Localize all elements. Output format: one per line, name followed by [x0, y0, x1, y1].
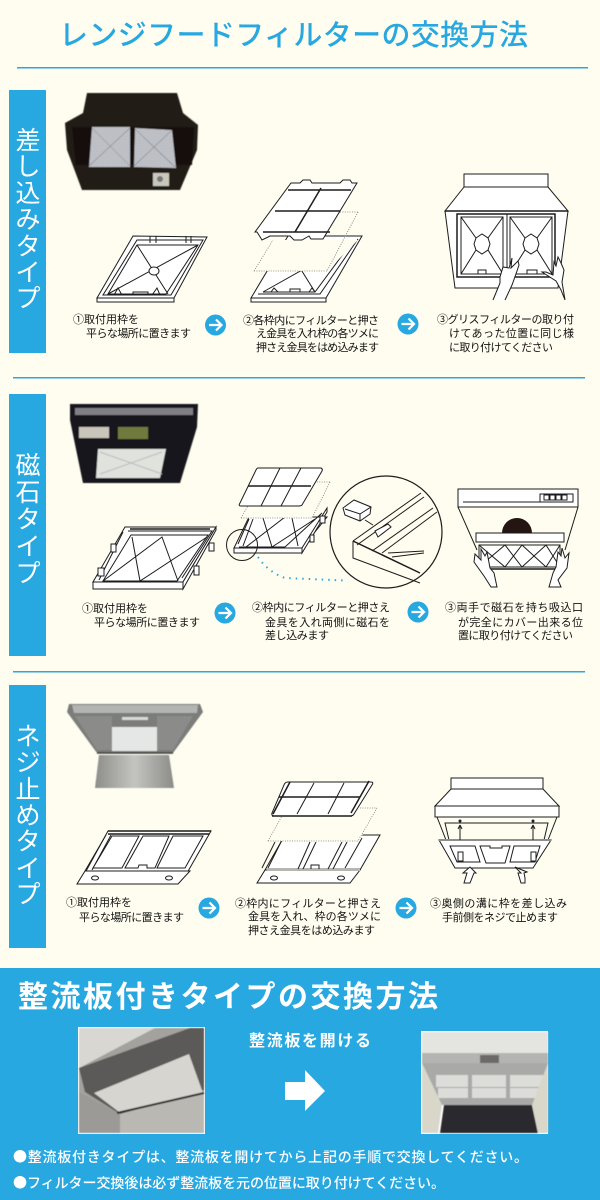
text: step 3: が完全にカバー出来る位 [458, 615, 583, 629]
text: step 2 [252, 600, 390, 642]
diagram: hood with hands step 3 [445, 174, 568, 300]
text: step 3: ③奥側の溝に枠を差し込み [430, 896, 567, 910]
caption: open the plate: 整流板を開ける [249, 1032, 371, 1050]
diagram: magnet frame step 1 [93, 527, 216, 589]
section label: magnet: 磁石タイプ [15, 452, 41, 588]
heading: 整流板付きタイプの交換方法 [18, 981, 438, 1014]
photo: closed baffle plate [78, 1027, 205, 1134]
notes: ●フィルター交換後は必ず整流板を元の位置に取り付けてください。 [13, 1173, 445, 1193]
text: step 2: ②各枠内にフィルターと押さ [243, 313, 379, 327]
text: step 1 [66, 895, 184, 924]
text: step 2: 金具を入れ、枠の各ツメに [248, 909, 381, 923]
arrow icon [205, 314, 226, 336]
text: step 2 [235, 896, 381, 937]
diagram: screw filter assembly step 2 [257, 781, 380, 883]
magnet block [343, 500, 371, 521]
diagram: hood with hands magnet step 3 [458, 489, 578, 587]
section label: screw [9, 685, 46, 948]
arrow icon [398, 314, 418, 334]
text: step 2: 押さえ金具をはめ込みます [248, 923, 375, 937]
diagram: hood with screws step 3 [435, 778, 559, 883]
arrow icon [198, 898, 220, 918]
section label: screw: ネジ止めタイプ [15, 723, 41, 909]
photo: black hood underside [70, 404, 198, 483]
text: step 2: ②枠内にフィルターと押さえ [235, 896, 381, 910]
arrow: white right [285, 1070, 325, 1111]
hand left [493, 258, 519, 300]
dotted leader [258, 557, 345, 580]
text: step 2: 差し込みます [265, 629, 329, 642]
text: step 1: ①取付用枠を [66, 895, 132, 909]
text: step 2: 押さえ金具をはめ込みます [256, 340, 379, 354]
title: レンジフードフィルターの交換方法 [59, 19, 528, 52]
arrow icon [214, 602, 236, 624]
text: step 1: 平らな場所に置きます [94, 615, 200, 629]
text: step 3 [445, 600, 583, 642]
text: step 2: え金具を入れ枠の各ツメに [256, 326, 379, 340]
text: step 3: 置に取り付けてください [458, 629, 573, 642]
text: step 1 [82, 601, 200, 629]
photo: black range hood [65, 93, 198, 190]
text: step 1: 平らな場所に置きます [86, 326, 191, 340]
text: step 1: ①取付用枠を [82, 601, 148, 615]
section label: sashikomi: 差し込みタイプ [15, 127, 41, 313]
arrow icon [408, 602, 428, 622]
text: step 3: ③グリスフィルターの取り付 [437, 312, 574, 326]
hand right [542, 257, 565, 300]
text: step 2: ②枠内にフィルターと押さえ [252, 600, 390, 614]
text: step 3 [430, 896, 567, 924]
notes [13, 1147, 528, 1193]
text: step 3 [437, 312, 574, 354]
photo: stainless hood with open plate [67, 704, 203, 788]
panel: magnet type [9, 394, 583, 656]
panel: baffle plate type [0, 968, 600, 1200]
notes: ●整流板付きタイプは、整流板を開けてから上記の手順で交換してください。 [13, 1147, 528, 1167]
photo: open baffle plate [421, 1031, 548, 1134]
diagram: magnet filter assembly step 2 [226, 468, 345, 580]
section label: magnet [9, 394, 46, 656]
section label: sashikomi [9, 90, 46, 353]
diagram: screw frame step 1 [77, 831, 211, 884]
text: step 2 [243, 313, 379, 354]
text: step 3: ③両手で磁石を持ち吸込口 [445, 600, 583, 614]
diagram: magnified detail circle [330, 476, 442, 588]
arrow icon [396, 898, 416, 918]
text: step 3: けてあった位置に同じ様 [449, 326, 574, 340]
text: step 3: 手前側をネジで止めます [442, 910, 558, 924]
text: step 1: 平らな場所に置きます [79, 910, 184, 924]
text: step 1: ①取付用枠を [73, 312, 139, 326]
diagram: filter assembly step 2 [251, 180, 362, 302]
text: step 2: 金具を入れ両側に磁石を [265, 616, 390, 629]
panel: sashikomi type [9, 90, 574, 354]
panel: screw type [9, 685, 567, 948]
diagram: frame step 1 [97, 236, 207, 302]
text: step 3: に取り付けてください [449, 341, 553, 354]
text: step 1 [73, 312, 191, 340]
